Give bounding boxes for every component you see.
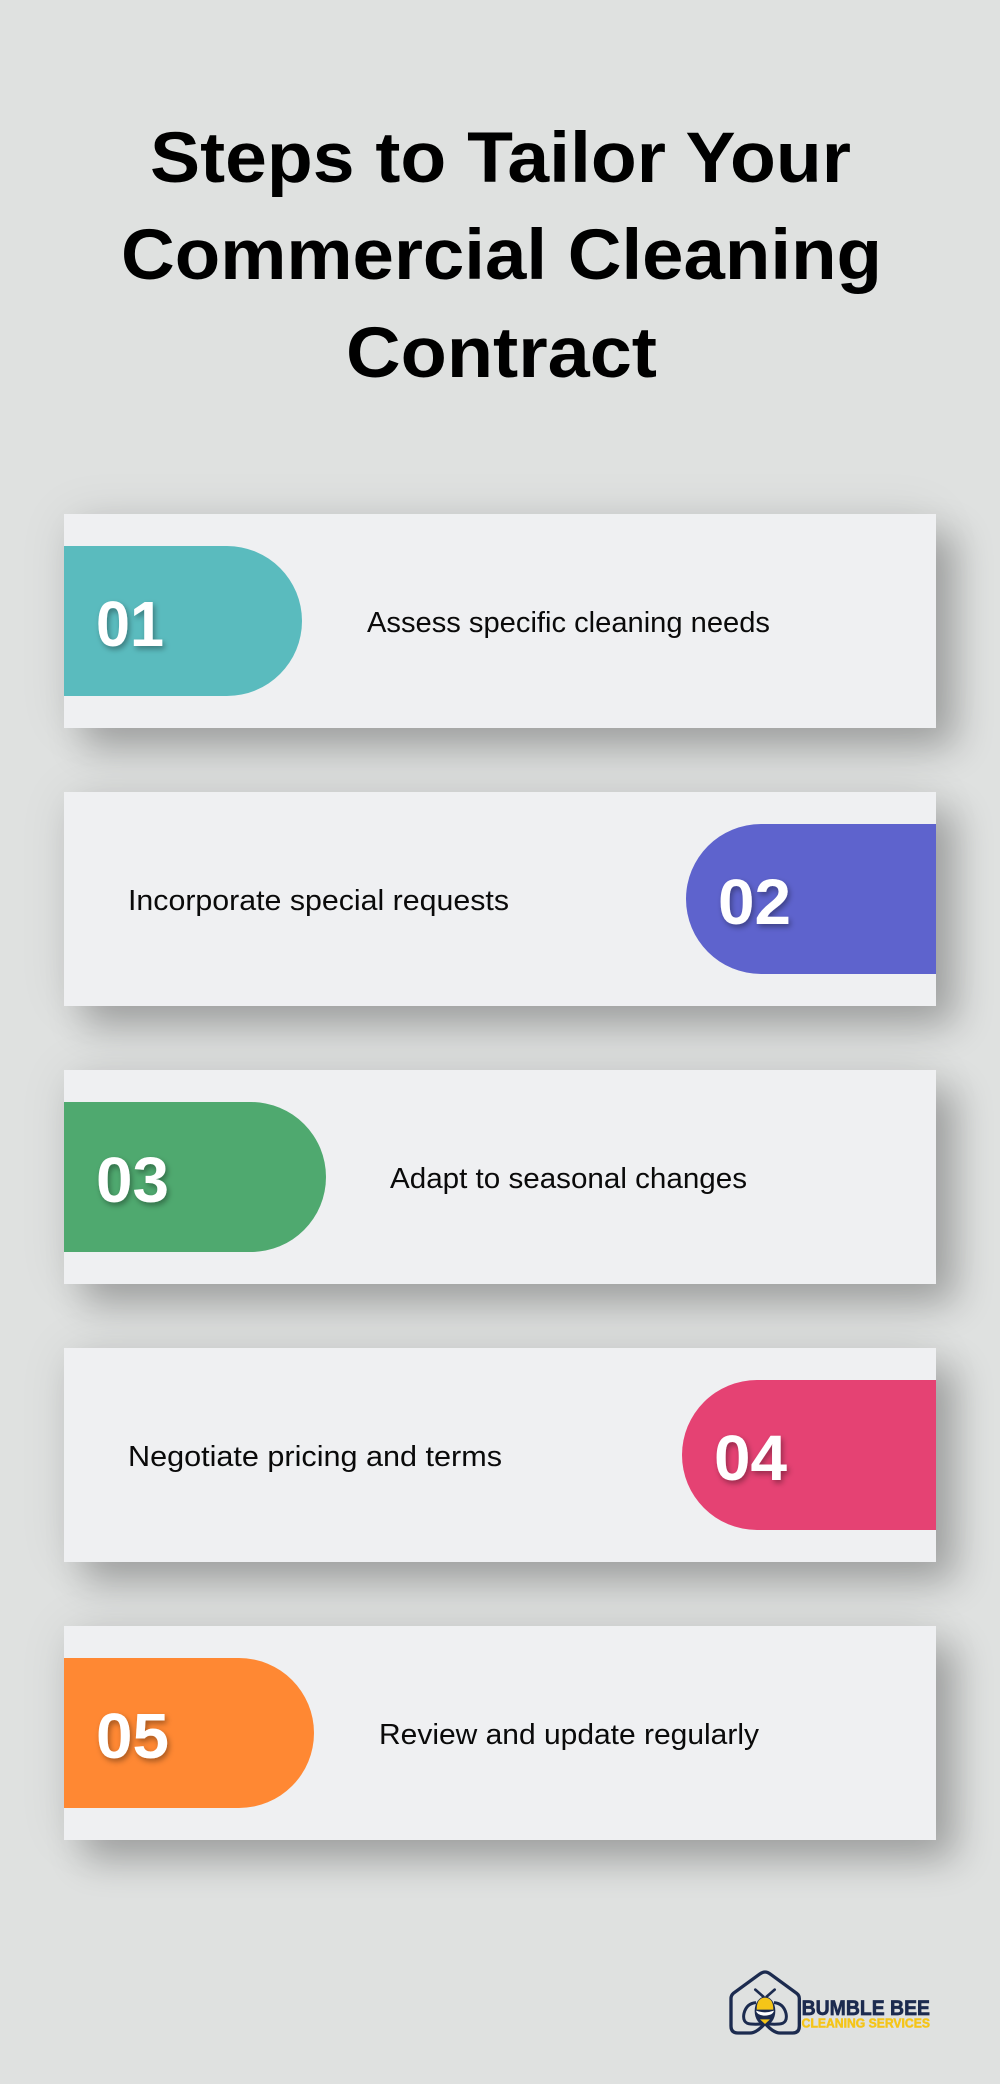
number badge 04 [682, 1380, 936, 1530]
logo tagline: CLEANING SERVICES [802, 2017, 930, 2031]
title: Steps to Tailor Your [150, 119, 851, 198]
number badge 05 [64, 1658, 314, 1808]
title: Contract [346, 314, 657, 393]
number 04: 04 [714, 1422, 787, 1494]
title: Commercial Cleaning [121, 216, 882, 295]
panel: step 05 [64, 1626, 936, 1840]
title [121, 119, 882, 393]
panel: step 03 [64, 1070, 936, 1284]
number 01: 01 [96, 588, 164, 660]
number 05: 05 [96, 1700, 169, 1772]
logo: Bumble Bee Cleaning Services [731, 1972, 930, 2033]
number 02: 02 [718, 866, 791, 938]
text 01: Assess specific cleaning needs [367, 607, 770, 639]
text 03: Adapt to seasonal changes [390, 1163, 747, 1195]
text 02: Incorporate special requests [128, 885, 509, 917]
panel: step 02 [64, 792, 936, 1006]
text 04: Negotiate pricing and terms [128, 1441, 502, 1473]
number badge 02 [686, 824, 936, 974]
logo wordmark: BUMBLE BEE [802, 1997, 930, 2020]
step card shadows [64, 514, 956, 1860]
number 03: 03 [96, 1144, 169, 1216]
icon: house with bee [731, 1972, 799, 2033]
panel: step 01 [64, 514, 936, 728]
number badge 01 [64, 546, 302, 696]
panel: step 04 [64, 1348, 936, 1562]
text 05: Review and update regularly [379, 1719, 760, 1751]
number badge 03 [64, 1102, 326, 1252]
